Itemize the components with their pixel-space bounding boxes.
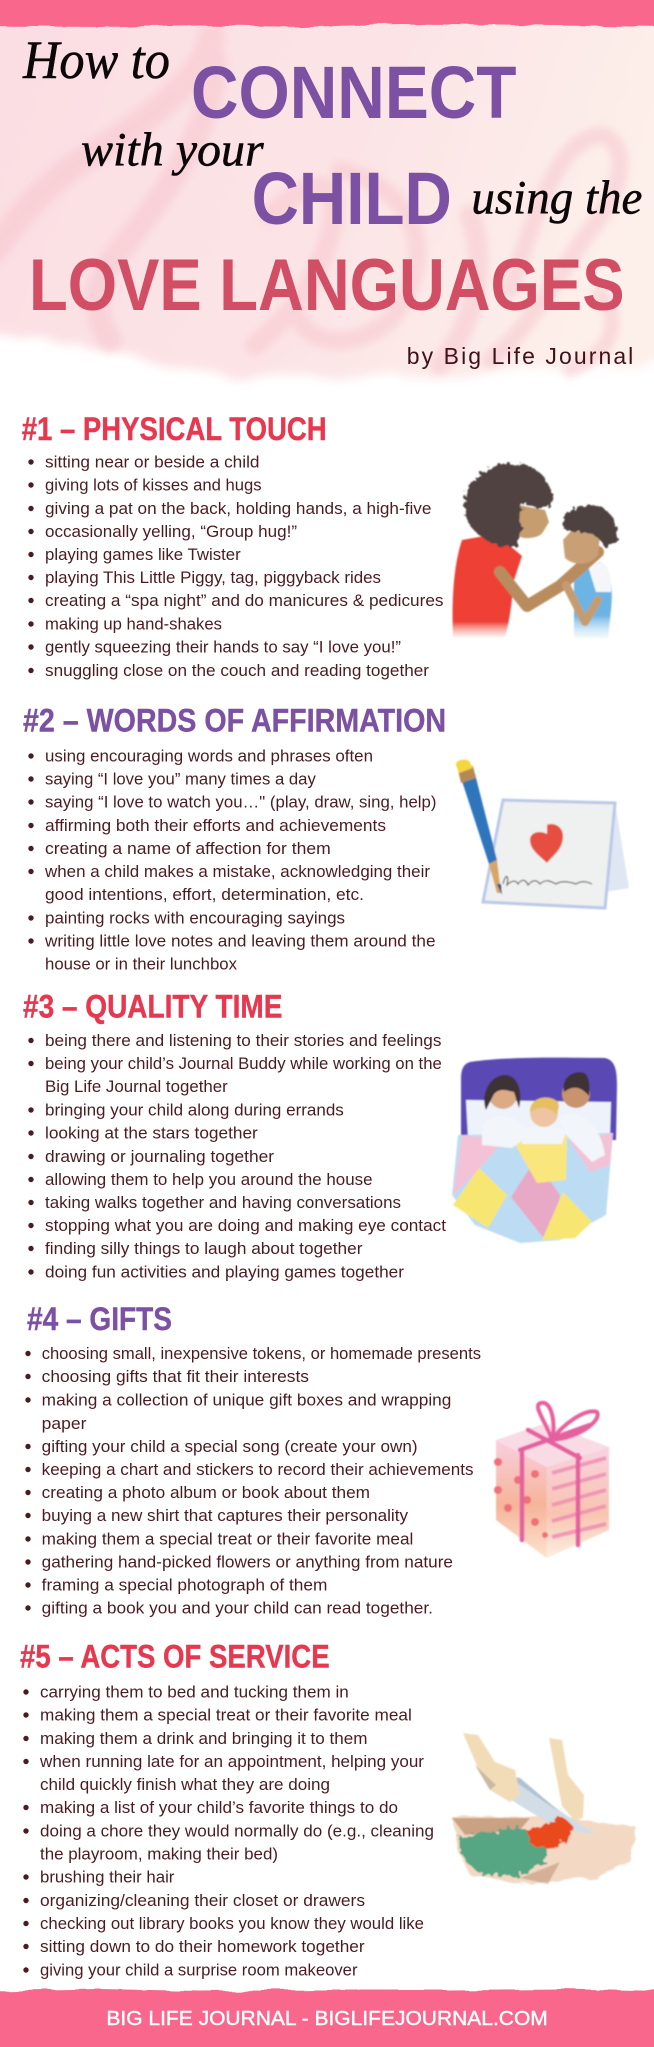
list: quality time ideas: bringing your child along during errands — [45, 1100, 344, 1120]
list: quality time ideas: looking at the stars together — [45, 1124, 258, 1142]
list: physical touch ideas: making up hand-shakes — [45, 614, 222, 634]
list: physical touch ideas: creating a “spa night” and do manicures & pedicures — [45, 591, 444, 610]
list: gift ideas: paper — [42, 1414, 87, 1433]
list: physical touch ideas — [28, 452, 444, 680]
list: gift ideas: framing a special photograph of them — [42, 1576, 327, 1594]
list: gift ideas: buying a new shirt that captures their personality — [42, 1506, 408, 1525]
list: quality time ideas: being your child’s Journal Buddy while working on the — [45, 1054, 442, 1073]
list: physical touch ideas: occasionally yelling, “Group hug!” — [45, 522, 297, 541]
list: acts of service ideas: sitting down to do their homework together — [40, 1937, 365, 1956]
list: gift ideas: making a collection of unique gift boxes and wrapping — [42, 1390, 451, 1410]
list: acts of service ideas: checking out library books you know they would like — [40, 1914, 424, 1933]
list: quality time ideas: stopping what you are doing and making eye contact — [45, 1216, 446, 1235]
panel: physical touch — [22, 411, 617, 680]
list: quality time ideas: Big Life Journal together — [45, 1077, 228, 1096]
panel: header — [0, 0, 654, 379]
list: acts of service ideas: giving your child a surprise room makeover — [40, 1960, 358, 1980]
title word: CONNECT: CONNECT — [191, 51, 516, 134]
list: physical touch ideas: giving lots of kisses and hugs — [45, 476, 262, 494]
list: quality time ideas: being there and listening to their stories and feelings — [45, 1031, 441, 1050]
list: acts of service ideas: the playroom, making their bed) — [40, 1844, 278, 1864]
list: gift ideas: choosing gifts that fit their interests — [42, 1367, 309, 1386]
list: acts of service ideas — [23, 1682, 434, 1980]
list: quality time ideas: drawing or journaling together — [45, 1147, 274, 1166]
illustration: hands chopping vegetables — [452, 1733, 636, 1884]
list: acts of service ideas: making a list of your child’s favorite things to do — [40, 1798, 398, 1817]
list: acts of service ideas: carrying them to bed and tucking them in — [40, 1682, 349, 1702]
script text: using the: using the — [471, 172, 642, 224]
list: gift ideas — [25, 1344, 481, 1618]
list: physical touch ideas: sitting near or beside a child — [45, 452, 260, 472]
illustration: mother and child touching — [453, 463, 617, 638]
heading #1: #1 – PHYSICAL TOUCH — [22, 411, 327, 447]
list: quality time ideas: allowing them to help you around the house — [45, 1170, 372, 1189]
footer text: BIG LIFE JOURNAL - BIGLIFEJOURNAL.COM — [106, 2008, 548, 2030]
script text: How to: How to — [22, 30, 170, 90]
list: gift ideas: gathering hand-picked flowers or anything from nature — [42, 1552, 453, 1572]
illustration: wrapped gift box — [494, 1403, 609, 1558]
list: words of affirmation ideas: writing little love notes and leaving them around the — [44, 932, 436, 950]
list: physical touch ideas: gently squeezing their hands to say “I love you!” — [45, 638, 401, 656]
list: physical touch ideas: snuggling close on the couch and reading together — [45, 661, 429, 680]
heading #3: #3 – QUALITY TIME — [23, 988, 282, 1024]
list: acts of service ideas: making them a drink and bringing it to them — [40, 1729, 368, 1748]
panel: acts of service — [20, 1638, 636, 1980]
list: acts of service ideas: child quickly finish what they are doing — [40, 1775, 330, 1794]
list: words of affirmation ideas: using encouraging words and phrases often — [45, 746, 373, 766]
panel: words of affirmation — [23, 702, 629, 974]
panel: footer — [0, 1989, 654, 2047]
list: acts of service ideas: when running late for an appointment, helping your — [39, 1752, 424, 1771]
title word: CHILD: CHILD — [252, 157, 452, 240]
byline: by Big Life Journal — [407, 343, 633, 369]
script text: with your: with your — [81, 124, 264, 176]
list: gift ideas: creating a photo album or book about them — [42, 1483, 370, 1502]
list: words of affirmation ideas: house or in their lunchbox — [45, 954, 237, 974]
list: physical touch ideas: playing games like Twister — [45, 545, 241, 564]
illustration: family in bed under quilt — [452, 1058, 617, 1243]
illustration: pencil and love note card — [456, 760, 629, 908]
panel: gifts — [25, 1301, 609, 1618]
list: words of affirmation ideas: saying “I love to watch you…" (play, draw, sing, help) — [45, 792, 436, 812]
list: gift ideas: making them a special treat or their favorite meal — [42, 1530, 413, 1548]
list: gift ideas: gifting your child a special song (create your own) — [42, 1437, 418, 1456]
heading #2: #2 – WORDS OF AFFIRMATION — [23, 702, 446, 738]
list: gift ideas: keeping a chart and stickers to record their achievements — [42, 1460, 474, 1479]
list: words of affirmation ideas — [28, 746, 436, 974]
footer pink band — [0, 1989, 654, 2047]
list: acts of service ideas: organizing/cleaning their closet or drawers — [40, 1891, 365, 1910]
list: words of affirmation ideas: when a child makes a mistake, acknowledging their — [44, 862, 430, 881]
list: words of affirmation ideas: saying “I love you” many times a day — [45, 770, 316, 788]
list: quality time ideas — [28, 1031, 446, 1282]
list: gift ideas: choosing small, inexpensive tokens, or homemade presents — [42, 1344, 481, 1363]
list: acts of service ideas: doing a chore they would normally do (e.g., cleaning — [40, 1822, 434, 1840]
watermark love script — [0, 35, 620, 370]
list: words of affirmation ideas: painting rocks with encouraging sayings — [45, 908, 345, 928]
list: physical touch ideas: playing This Little Piggy, tag, piggyback rides — [45, 568, 381, 587]
top pink bar — [0, 0, 654, 27]
panel: quality time — [23, 988, 617, 1282]
list: gift ideas: gifting a book you and your child can read together. — [42, 1598, 433, 1618]
list: acts of service ideas: making them a special treat or their favorite meal — [40, 1706, 412, 1724]
list: quality time ideas: doing fun activities and playing games together — [45, 1262, 404, 1282]
list: physical touch ideas: giving a pat on the back, holding hands, a high-five — [45, 499, 431, 518]
list: quality time ideas: finding silly things to laugh about together — [45, 1239, 363, 1258]
list: acts of service ideas: brushing their hair — [40, 1868, 175, 1886]
watercolor header background — [0, 10, 654, 379]
list: words of affirmation ideas: creating a name of affection for them — [45, 839, 331, 858]
heading #4: #4 – GIFTS — [27, 1301, 172, 1337]
list: words of affirmation ideas: good intentions, effort, determination, etc. — [45, 885, 364, 904]
heading #5: #5 – ACTS OF SERVICE — [20, 1638, 330, 1674]
list: quality time ideas: taking walks together and having conversations — [45, 1193, 401, 1212]
list: words of affirmation ideas: affirming both their efforts and achievements — [45, 816, 386, 835]
